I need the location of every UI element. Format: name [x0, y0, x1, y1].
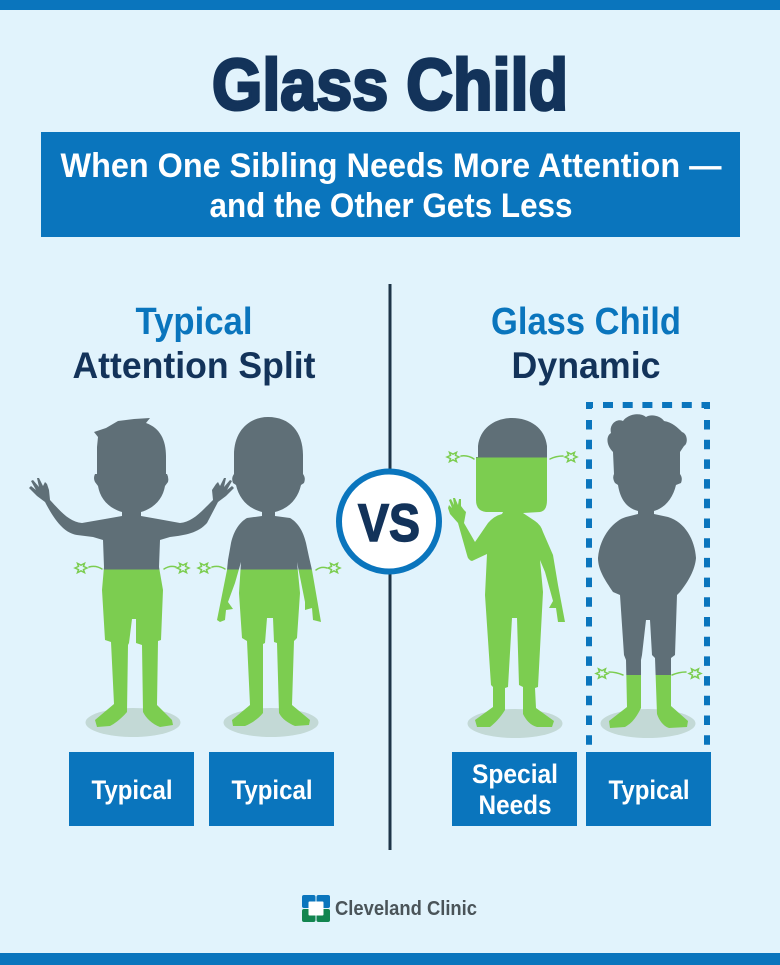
figure: typical sibling with raised arms: [29, 418, 234, 737]
subtitle banner: [41, 132, 740, 237]
left heading: Attention Split: [72, 345, 316, 386]
label: special needs: Needs: [478, 790, 552, 820]
logo: Cleveland Clinic: [302, 895, 477, 922]
left heading: Typical: [136, 301, 252, 343]
label: typical glass child: Typical: [608, 775, 690, 805]
top bar: [0, 0, 780, 10]
vs badge: VS: [358, 494, 420, 553]
label: typical 2: [209, 752, 334, 826]
figure: special needs sibling: [447, 418, 577, 738]
right heading: Dynamic: [512, 345, 660, 386]
subtitle banner: and the Other Gets Less: [210, 187, 572, 225]
subtitle banner: When One Sibling Needs More Attention —: [60, 147, 722, 185]
title: Glass Child: [212, 46, 568, 126]
label: typical 1: Typical: [92, 775, 172, 805]
label: special needs: Special: [472, 759, 558, 789]
logo: Cleveland Clinic: Cleveland Clinic: [335, 898, 477, 920]
label: typical 1: [69, 752, 194, 826]
right heading: [491, 301, 681, 386]
label: typical glass child: [586, 752, 711, 826]
center divider: [388, 284, 392, 850]
figure: glass child sibling: [596, 414, 701, 738]
figure: typical sibling with arms down: [198, 417, 340, 737]
bottom bar: [0, 953, 780, 965]
label: typical 2: Typical: [232, 775, 312, 805]
vs badge: [339, 472, 439, 572]
label: special needs: [452, 752, 577, 826]
left heading: [72, 301, 316, 386]
right heading: Glass Child: [491, 301, 681, 343]
dashed highlight around glass child: [586, 402, 710, 750]
